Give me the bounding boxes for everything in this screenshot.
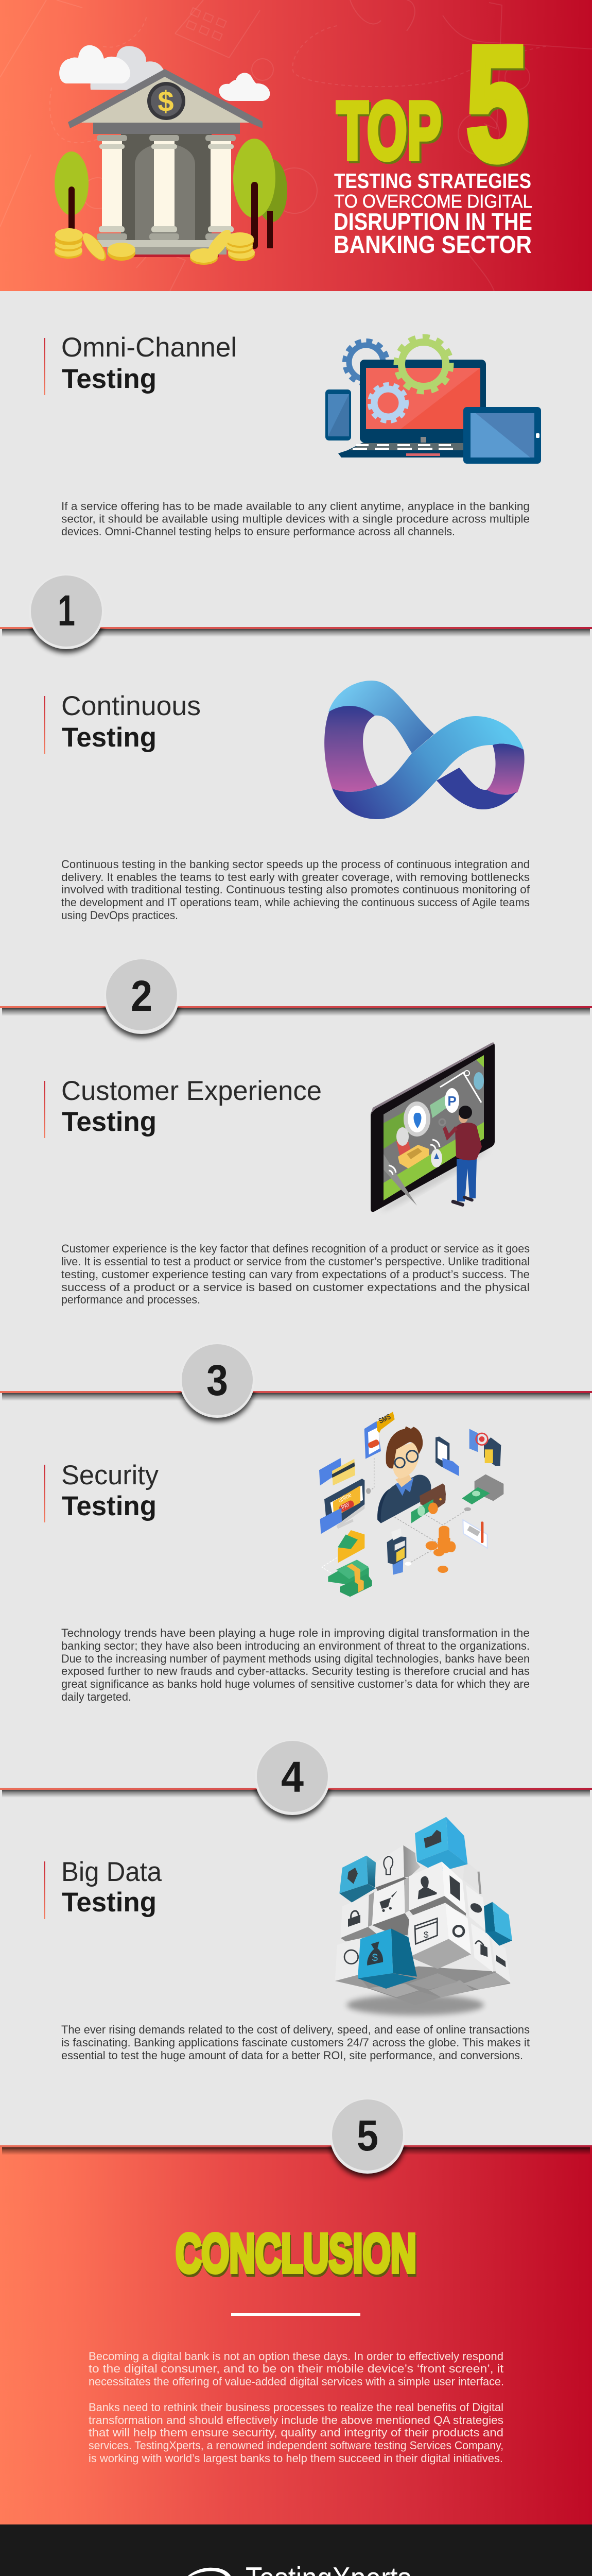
heading: omni-channel testing [44, 332, 237, 395]
text: security paragraph: Technology trends have been playing a huge role in improving digital transformation in the [61, 1626, 530, 1639]
heading: continuous testing [44, 691, 201, 754]
icon: clouds [59, 45, 270, 101]
title: top 5: TOP [337, 86, 441, 176]
panel: customer experience testing [44, 1042, 530, 1306]
heading: security testing [44, 1460, 159, 1522]
text: omni-channel paragraph [61, 500, 530, 538]
phone with sms: SMS [377, 1413, 392, 1426]
subtitle: TESTING STRATEGIES [334, 169, 531, 193]
icon: location pin [404, 1101, 430, 1137]
icon: data cubes: $ [372, 1953, 378, 1964]
title: top 5: 5 [468, 15, 530, 196]
subtitle: BANKING SECTOR [334, 231, 532, 259]
text: big data paragraph: is fascinating. Banking applications fascinate customers 24/7 across the globe. This makes it [61, 2036, 530, 2049]
text: conclusion paragraph 1: to the digital consumer, and to be on their mobile device’s ‘front screen’, it [89, 2362, 503, 2375]
heading: continuous testing: Testing [62, 722, 156, 753]
text: continuous paragraph [61, 858, 530, 922]
icon: trees [55, 139, 287, 249]
heading: security testing: Testing [62, 1491, 156, 1521]
text: security paragraph: Due to the increasing number of payment methods using digital technologies, banks have been [61, 1652, 530, 1665]
divider 3 with number: 3 [206, 1356, 228, 1404]
text: security paragraph: great significance as banks hold huge volumes of sensitive customer’s data for which they are [61, 1677, 530, 1690]
card cube [409, 1903, 449, 1957]
text: omni-channel paragraph: sector, it should be available using multiple devices with a single procedure across multiple [61, 512, 530, 526]
heading: customer experience testing: Testing [62, 1107, 156, 1137]
online pay monitor: online [337, 1491, 353, 1504]
white cubes [463, 1860, 481, 1894]
title: top 5: TOP [339, 88, 443, 178]
heading: conclusion [176, 2223, 417, 2286]
piggy and tag cubes [466, 1885, 486, 1931]
text: security paragraph: exposed further to new frauds and cyber-attacks. Security testing is therefore crucial and has [61, 1665, 530, 1677]
cash stacks [328, 1560, 372, 1597]
icon: infinity loop [324, 681, 525, 819]
text: security paragraph: daily targeted. [61, 1690, 131, 1703]
icon: tablet map with person [371, 1042, 495, 1214]
icon: person [439, 1106, 482, 1207]
text: conclusion paragraph 1: necessitates the offering of value-added digital services with a simple user interface. [89, 2375, 504, 2388]
blue cubes [415, 1817, 448, 1861]
divider 5 with number: 5 [357, 2111, 378, 2160]
text: customer experience paragraph: success of a product or a service is based on customer expectations and the physical [61, 1281, 530, 1294]
icon: gold coins [55, 226, 255, 265]
text: conclusion paragraph 1 [89, 2350, 504, 2388]
text: big data paragraph: The ever rising demands related to the cost of delivery, speed, and ease of online transactions [61, 2023, 530, 2036]
phone and card [436, 1436, 459, 1476]
text: continuous paragraph: Continuous testing in the banking sector speeds up the process of continuous integration and [61, 858, 530, 871]
wallet and money [411, 1483, 446, 1523]
blue gear [344, 341, 388, 384]
text: continuous paragraph: involved with traditional testing. Continuous testing also promotes continuous monitoring of [61, 883, 530, 896]
panel: security testing [44, 1412, 530, 1703]
panel: continuous testing [44, 681, 530, 922]
cube icons [347, 1830, 506, 1967]
title: top 5 [337, 13, 530, 196]
money cube [358, 1928, 393, 1978]
right cube [484, 1902, 495, 1933]
divider 5 with number [0, 2098, 592, 2177]
background line pattern [0, 0, 592, 291]
green gear [396, 336, 451, 392]
text: big data paragraph [61, 2023, 530, 2062]
icon: digital payment collage [319, 1412, 503, 1597]
panel: conclusion [0, 2146, 592, 2524]
heading: conclusion: CONCLUSION [176, 2223, 416, 2284]
credit cards [319, 1458, 355, 1485]
logo: testingxperts [181, 2561, 411, 2576]
icon: devices and gears [325, 336, 541, 464]
tablet [463, 407, 541, 464]
online pay monitor: PAY [340, 1501, 351, 1511]
person [377, 1426, 431, 1523]
icon: taxi [398, 1145, 429, 1168]
heading: continuous testing: Continuous [61, 691, 201, 721]
laptop [360, 360, 486, 443]
panel: omni-channel testing [44, 332, 541, 538]
heading: big data testing: Big Data [61, 1857, 162, 1887]
phone [325, 389, 351, 440]
text: continuous paragraph: the development and IT operations team, while achieving the continuous success of Agile teams [61, 896, 530, 909]
text: customer experience paragraph: Customer experience is the key factor that defines recognition of a product or service as it goes [61, 1242, 530, 1255]
footer [0, 2524, 592, 2576]
heading: omni-channel testing: Omni-Channel [61, 332, 237, 363]
divider 1 with number [0, 574, 592, 653]
phone with sms [364, 1412, 395, 1459]
icon: dollar medallion [147, 82, 185, 120]
icon: parking marker: P [447, 1093, 457, 1109]
card terminal and bill [469, 1429, 501, 1466]
text: conclusion paragraph 1: Becoming a digital bank is not an option these days. In order to effectively respond [89, 2350, 503, 2363]
heading: customer experience testing: Customer Experience [61, 1076, 322, 1106]
divider 2 with number: 2 [131, 972, 152, 1020]
underline [231, 2313, 360, 2316]
divider 3 with number [0, 1343, 592, 1421]
heading: big data testing: Testing [62, 1887, 156, 1918]
panel: big data testing [44, 1817, 530, 2062]
text: conclusion paragraph 2: transformation and should effectively include the above mentioned QA strategies [89, 2414, 503, 2427]
divider 4 with number: 4 [281, 1753, 304, 1801]
title: top 5: 5 [466, 13, 528, 194]
roof [68, 69, 263, 128]
divider 4 with number [0, 1740, 592, 1819]
heading: omni-channel testing: Testing [62, 364, 156, 394]
heading: big data testing [44, 1857, 162, 1919]
heading: customer experience testing [44, 1076, 322, 1138]
envelope [338, 1530, 364, 1563]
text: continuous paragraph: using DevOps practices. [61, 909, 178, 922]
subtitle: TO OVERCOME DIGITAL [334, 191, 532, 212]
atm cash [462, 1475, 503, 1504]
text: security paragraph [61, 1626, 530, 1703]
text: conclusion paragraph 2: Banks need to rethink their business processes to realize the real benefits of Digital [89, 2401, 503, 2414]
icon: parking marker [445, 1088, 459, 1113]
subtitle: DISRUPTION IN THE [334, 208, 532, 235]
text: customer experience paragraph [61, 1242, 530, 1306]
icon: data cubes [335, 1817, 512, 2015]
text: conclusion paragraph 2 [89, 2401, 503, 2465]
divider 2 with number [0, 959, 592, 1038]
header banner [0, 0, 592, 291]
text: security paragraph: banking sector; they have also been introducing an environment of threat to the organizations. [61, 1639, 530, 1652]
columns [102, 140, 231, 228]
text: customer experience paragraph: performance and processes. [61, 1293, 200, 1306]
light gear [370, 384, 407, 421]
divider 1 with number: 1 [58, 586, 75, 635]
person cube [409, 1861, 444, 1910]
icon: dollar medallion: $ [158, 85, 174, 117]
text: continuous paragraph: delivery. It enables the teams to test early with greater coverage, with removing bottlenecks [61, 871, 530, 884]
check [463, 1520, 487, 1548]
icon: bank building [55, 45, 287, 265]
heading: conclusion: CONCLUSION [177, 2226, 417, 2286]
heading: security testing: Security [61, 1460, 159, 1490]
card reader [387, 1529, 406, 1575]
text: customer experience paragraph: testing, customer experience testing can vary from expectations of a product’s success. The [61, 1268, 530, 1281]
cube undersides [336, 1967, 511, 2005]
text: conclusion paragraph 2: services. TestingXperts, a renowned independent software testing Services Company, [89, 2439, 503, 2452]
text: conclusion paragraph 2: that will help them ensure security, quality and integrity of their products and [89, 2426, 503, 2439]
text: customer experience paragraph: live. It is essential to test a product or service from the customer’s perspective. Unlike traditional [61, 1255, 530, 1268]
text: omni-channel paragraph: devices. Omni-Channel testing helps to ensure performance across all channels. [61, 525, 455, 538]
icon: data cubes: $ [424, 1930, 429, 1940]
subtitle [334, 169, 532, 259]
coins [426, 1526, 456, 1573]
text: big data paragraph: essential to test the huge amount of data for a better ROI, site performance, and conversions. [61, 2049, 523, 2062]
text: omni-channel paragraph: If a service offering has to be made available to any client anytime, anyplace in the banking [61, 500, 530, 513]
text: conclusion paragraph 2: is working with world’s largest banks to help them succeed in their digital initiatives. [89, 2452, 503, 2465]
online pay monitor [320, 1479, 364, 1534]
